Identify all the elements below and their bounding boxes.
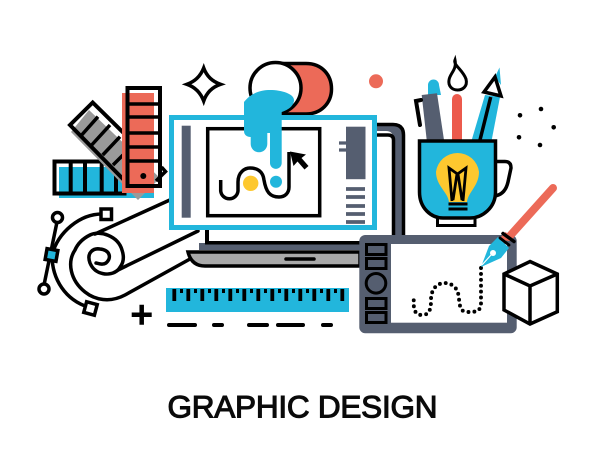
plus sign <box>132 305 152 325</box>
pen nib and handle <box>481 188 553 267</box>
graphics tablet <box>359 235 517 333</box>
red dot <box>369 74 383 88</box>
3D cube <box>504 262 557 324</box>
paint drip <box>244 90 294 169</box>
pens and pencil <box>416 60 501 140</box>
blue dot <box>270 176 282 188</box>
ruler <box>166 288 349 312</box>
bezier curve tool <box>39 209 112 315</box>
dashes <box>169 323 331 327</box>
title: GRAPHIC DESIGN <box>168 388 438 424</box>
laptop <box>188 124 405 266</box>
design window <box>172 118 374 228</box>
sparkle star <box>187 68 220 101</box>
cursor arrow <box>290 152 308 170</box>
yellow dot <box>243 176 258 191</box>
paint can <box>250 62 332 114</box>
mug with light bulb <box>420 141 511 226</box>
drawn squiggle <box>221 152 289 199</box>
pencil holder dots <box>517 107 556 147</box>
rolled paper <box>71 199 198 300</box>
colour swatch fan <box>54 88 166 200</box>
